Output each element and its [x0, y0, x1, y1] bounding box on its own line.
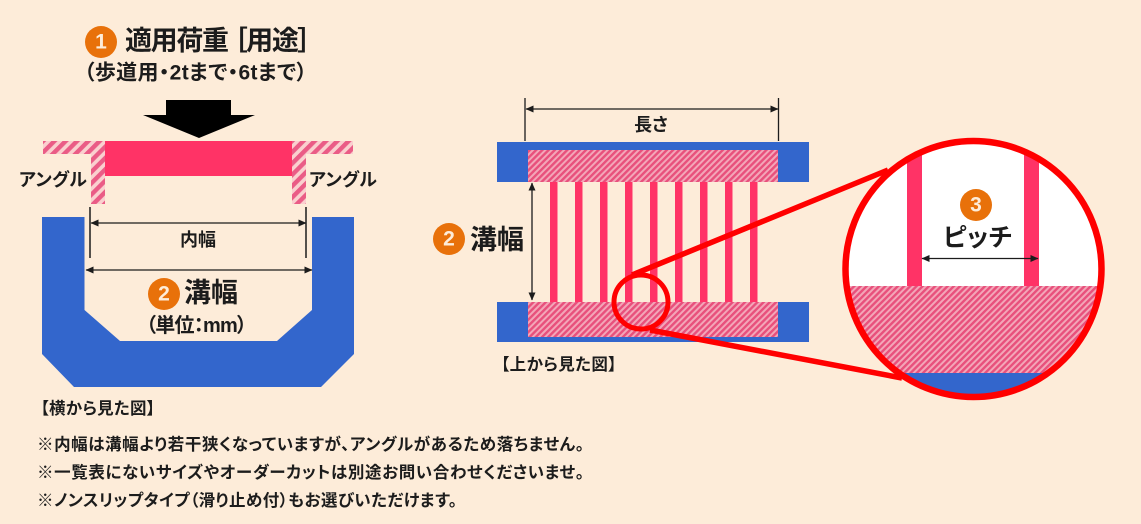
detail: right bar [1024, 155, 1039, 286]
dimension: inner width [90, 207, 306, 258]
left angle [43, 141, 105, 204]
magnifier small circle [614, 275, 668, 329]
magnified detail circle [840, 130, 1110, 403]
caption: top view: 【上から見た図】 [501, 355, 616, 374]
caption: side view: 【横から見た図】 [40, 399, 155, 418]
top hatched angle [528, 150, 778, 182]
label: right angle: アングル [309, 169, 377, 190]
label: pitch: 3 [970, 194, 982, 216]
detail: left bar [907, 155, 922, 286]
notes: ※内幅は溝幅より若干狭くなっていますが、アングルがあるため落ちません。 [37, 434, 584, 454]
notes [37, 434, 584, 510]
dimension: groove width vertical [531, 183, 533, 300]
channel: blue side frame [42, 217, 354, 387]
dimension: inner width: 内幅 [180, 230, 216, 250]
dimension: length [525, 98, 778, 141]
label: groove width: 溝幅 [470, 225, 524, 255]
title: applicable load [84, 26, 311, 84]
notes: ※一覧表にないサイズやオーダーカットは別途お問い合わせくださいませ。 [37, 462, 584, 482]
right angle [292, 141, 353, 204]
grating: pink bar [105, 141, 292, 176]
bottom blue frame [497, 302, 809, 342]
label: groove width: 2 [443, 228, 455, 250]
label: groove width [146, 278, 247, 337]
title: applicable load: 1 [95, 30, 107, 54]
detail: hatched angle [840, 286, 1110, 373]
bottom hatched angle [528, 302, 778, 337]
dimension: pitch [922, 258, 1038, 260]
label: left angle: アングル [19, 169, 87, 190]
dimension: length: 長さ [634, 115, 668, 135]
detail: blue frame [904, 373, 1042, 394]
notes: ※ノンスリップタイプ（滑り止め付）もお選びいただけます。 [37, 491, 457, 510]
bearing bars [550, 182, 758, 302]
icon: load arrow [143, 100, 255, 138]
label: groove width: 溝幅 [184, 278, 238, 308]
label: groove width [433, 223, 524, 255]
top view diagram [433, 98, 809, 342]
label: pitch: ピッチ [943, 224, 1012, 252]
title: applicable load: 適用荷重 ［用途］ [125, 26, 311, 56]
side view diagram [19, 141, 377, 387]
magnifier lines [632, 170, 902, 378]
label: groove width: 2 [158, 282, 170, 306]
top blue frame [497, 142, 809, 182]
label: pitch [943, 189, 1012, 252]
title: applicable load: （歩道用・2tまで・6tまで） [84, 62, 307, 84]
label: groove width: （単位：mm） [146, 314, 247, 337]
dimension: groove width [86, 269, 312, 271]
